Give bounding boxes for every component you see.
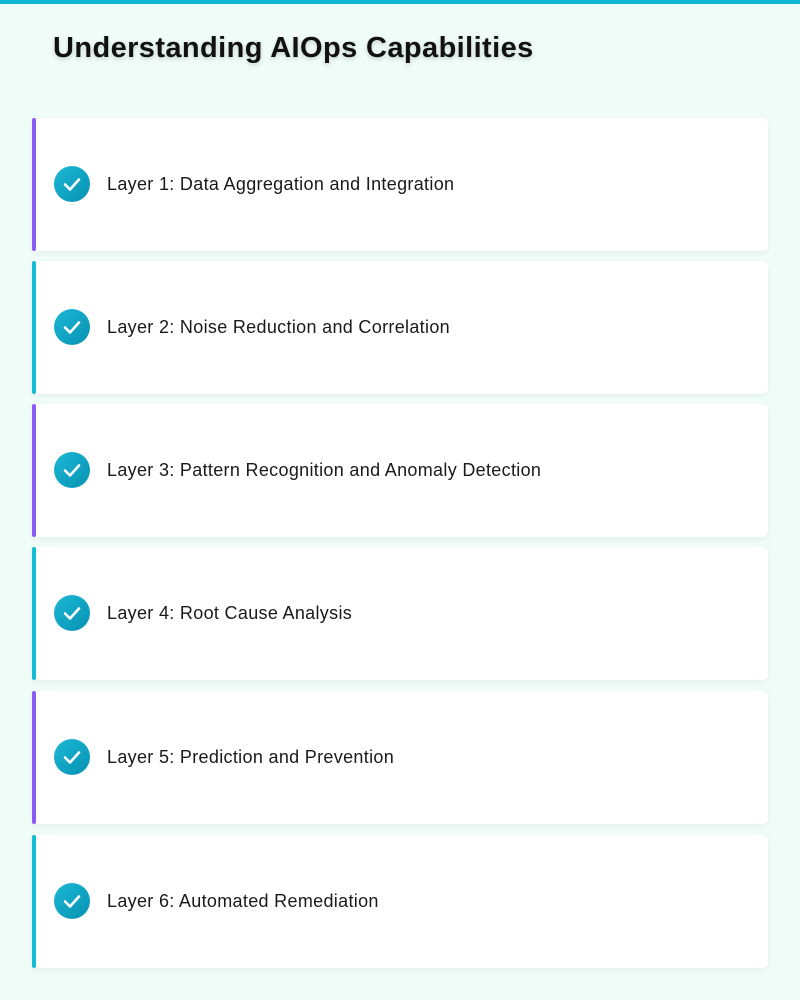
- title: Understanding AIOps Capabilities: [53, 32, 534, 64]
- text: Layer 4: Root Cause Analysis: [107, 603, 352, 623]
- icon: check: [54, 166, 90, 202]
- icon: check: [54, 309, 90, 345]
- icon: check: [54, 883, 90, 919]
- icon: check: [54, 452, 90, 488]
- card: layer 6: [32, 835, 768, 968]
- icon: check: [54, 739, 90, 775]
- card: layer 5: [32, 691, 768, 824]
- card: layer 3: [32, 404, 768, 537]
- card: layer 4: [32, 547, 768, 680]
- card: layer 2: [32, 261, 768, 394]
- card: layer 1: [32, 118, 768, 251]
- text: Layer 5: Prediction and Prevention: [107, 747, 394, 767]
- text: Layer 2: Noise Reduction and Correlation: [107, 317, 450, 337]
- icon: check: [54, 595, 90, 631]
- text: Layer 6: Automated Remediation: [107, 891, 379, 911]
- text: Layer 1: Data Aggregation and Integration: [107, 174, 454, 194]
- text: Layer 3: Pattern Recognition and Anomaly Detection: [107, 460, 541, 480]
